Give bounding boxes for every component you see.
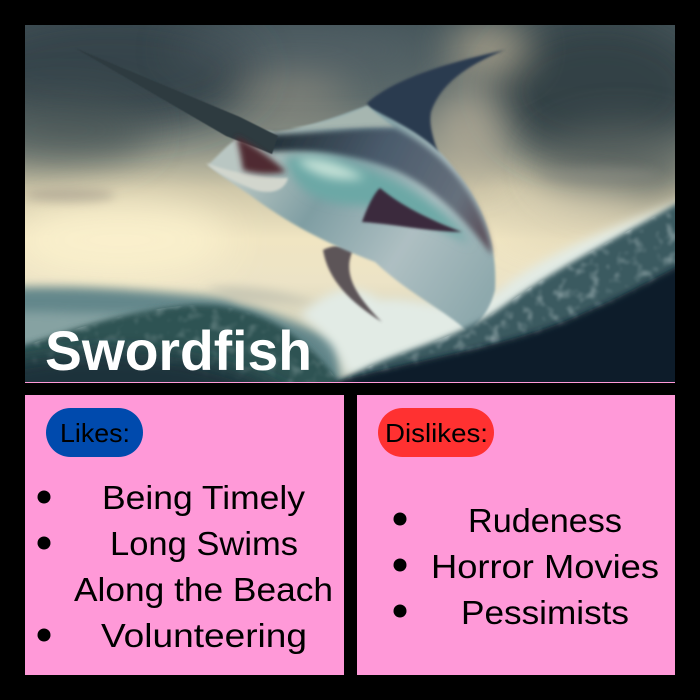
dislikes list xyxy=(394,502,659,631)
dislikes heading pill: Dislikes: xyxy=(385,418,488,448)
distant sea xyxy=(25,280,345,382)
fish lower jaw xyxy=(206,163,288,192)
likes heading pill: Likes: xyxy=(60,418,130,448)
likes heading pill xyxy=(46,408,143,457)
likes list: Long Swims xyxy=(110,525,298,562)
gill dark patch xyxy=(362,188,462,232)
panel: swordfish photo xyxy=(25,25,675,382)
panel: dislikes xyxy=(357,395,675,675)
fish mouth xyxy=(236,136,286,174)
pink divider line under photo xyxy=(25,382,675,383)
dislikes list: Rudeness xyxy=(468,502,622,539)
teal side stripe xyxy=(285,156,470,245)
dislikes heading pill xyxy=(378,408,494,457)
light back strip xyxy=(290,106,395,129)
likes list: Along the Beach xyxy=(74,571,333,608)
left wave xyxy=(25,301,340,382)
fish pectoral fin xyxy=(323,246,382,322)
dorsal fin xyxy=(366,49,504,152)
fish body xyxy=(208,106,495,332)
dislikes list: Horror Movies xyxy=(431,548,659,585)
right wave xyxy=(332,200,675,382)
splash foam xyxy=(300,195,700,376)
fish back shading xyxy=(262,128,492,255)
dislikes list: Pessimists xyxy=(461,594,629,631)
likes list: Being Timely xyxy=(102,479,306,516)
likes list: Volunteering xyxy=(101,617,307,654)
sky background xyxy=(25,25,675,382)
likes list xyxy=(38,479,333,654)
fish bill xyxy=(75,48,278,154)
panel: likes xyxy=(25,395,344,675)
title: Swordfish: Swordfish xyxy=(45,319,312,382)
silver highlight xyxy=(297,159,365,179)
